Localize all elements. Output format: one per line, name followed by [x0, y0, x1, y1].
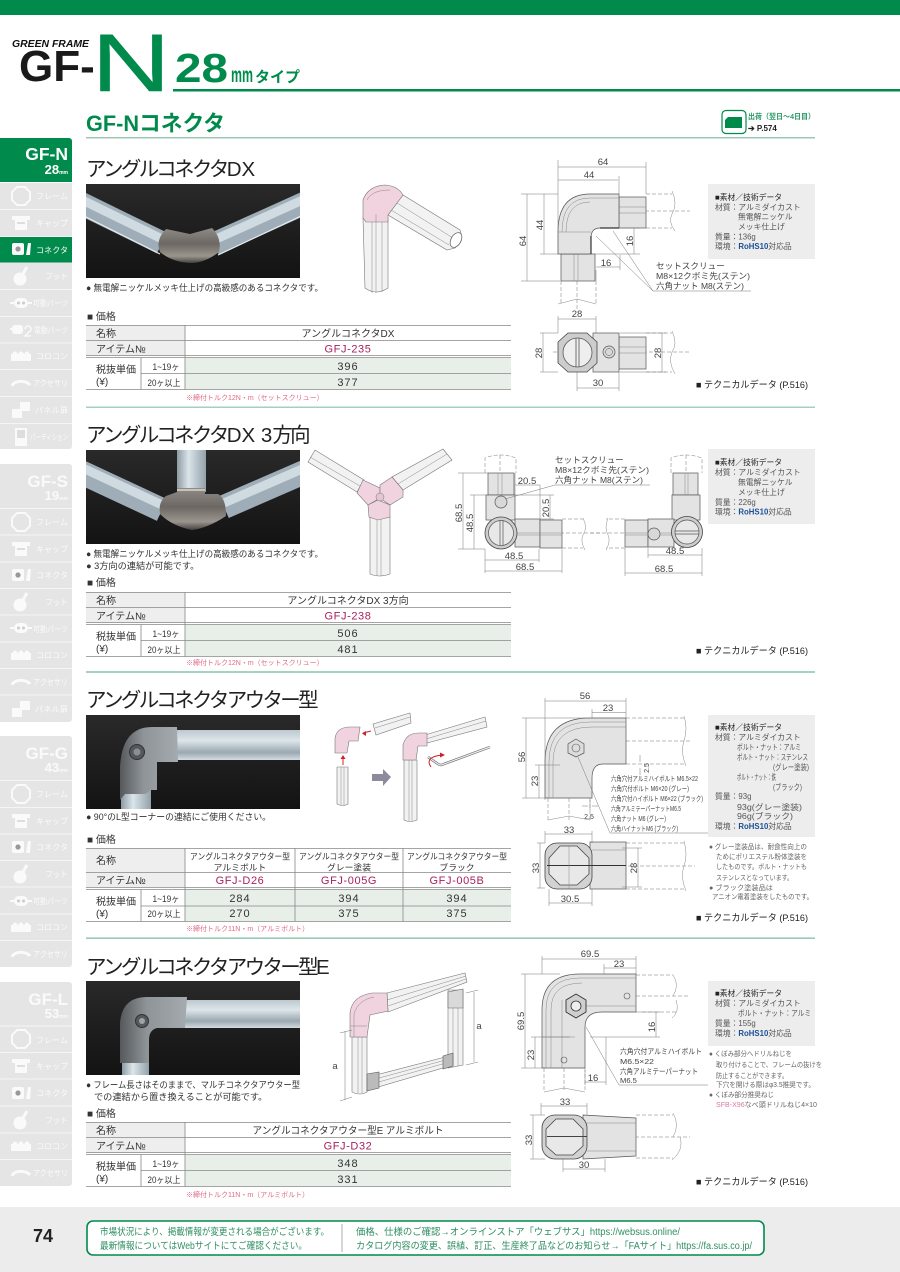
section 2 technical data link: ■ テクニカルデータ (P.516)	[696, 645, 808, 657]
section 2 price table	[86, 592, 511, 656]
section 4 dimension drawing: 69.5	[516, 1012, 527, 1030]
section 3 material data box: 材質：アルミダイカスト	[715, 732, 801, 742]
section 4 torque note: ※締付トルク11N・m（アルミボルト）	[186, 1190, 309, 1199]
section 1 end-view drawing	[534, 309, 690, 391]
shipping badge: 出荷（翌日〜4日目）	[748, 112, 815, 121]
section 3 material data box: 質量：93g	[715, 791, 751, 801]
section 2 left dimension drawing: 68.5	[516, 562, 534, 573]
sidebar: GF-L 53mm: GF-L	[28, 990, 68, 1009]
sidebar: GF-L 53mm: アクセサリ	[33, 1169, 68, 1178]
section 1 isometric illustration	[363, 185, 464, 293]
section 4 title: アングルコネクタアウター型E	[86, 956, 330, 979]
section 3 finish notes: ステンレスとなっています。	[716, 874, 793, 882]
section 4 frame illustration	[332, 973, 482, 1101]
sidebar: GF-L 53mm	[0, 982, 72, 1186]
section 4 material data box: 環境：RoHS10対応品	[715, 1028, 792, 1038]
section 4 frame illustration: a	[332, 1061, 338, 1072]
section 3 dimension drawing: 六角ハイナットM6 (ブラック)	[611, 824, 678, 833]
section 3 price table: 270	[229, 908, 251, 920]
section 3 finish notes: したものです。ボルト・ナットも	[716, 863, 807, 871]
section 2 title: アングルコネクタDX 3方向	[86, 424, 309, 447]
section 1 price table: 20ヶ以上	[148, 378, 180, 388]
section 3 material data box: 96g(ブラック)	[737, 811, 793, 821]
section 4 dimension drawing: M6.5	[620, 1076, 637, 1085]
section 2 left dimension drawing	[454, 455, 650, 573]
section 2 material data box: 質量：226g	[715, 497, 756, 507]
section 3 photo: outer elbow	[86, 715, 300, 809]
section 1 price table: アイテム№	[96, 344, 146, 356]
series logo: GF-N 28mm type: mm	[231, 64, 253, 87]
section 2 left dimension drawing: 68.5	[454, 504, 465, 522]
section 3 dimension drawing: 六角ナット M6 (グレー)	[611, 814, 666, 823]
section 4 end-view drawing: 33	[524, 1135, 535, 1145]
sidebar: GF-S 19mm: パネル扉	[35, 705, 68, 714]
sidebar: GF-S 19mm: フット	[45, 598, 68, 607]
top green band	[0, 0, 900, 15]
section 3 end-view drawing: 28	[629, 863, 640, 873]
section 2 material data box: 材質：アルミダイカスト	[715, 467, 801, 477]
section 3 end-view drawing: 30.5	[561, 894, 579, 905]
section 3 price table	[86, 848, 511, 922]
section 3 dimension drawing: 六角穴付ボルト M6×20 (グレー)	[611, 784, 689, 793]
sidebar: GF-G 43mm: 可動パーツ	[33, 897, 68, 906]
section 1 price label: ■ 価格	[87, 310, 116, 323]
sidebar: GF-G 43mm: アクセサリ	[33, 950, 68, 959]
sidebar: GF-S 19mm: 可動パーツ	[33, 625, 68, 634]
section 4 end-view drawing: 33	[560, 1097, 570, 1108]
sidebar: GF-G 43mm: GF-G	[26, 744, 68, 763]
section 3 material data box: (グレー塗装)	[773, 762, 809, 772]
section 1 material data box: ■素材／技術データ	[715, 192, 782, 202]
section 2 right dimension drawing: 48.5	[666, 546, 684, 557]
sidebar: GF-N 28mm: キャップ	[36, 219, 68, 228]
section 3 dimension drawing: 六角穴付ハイボルト M6×22 (ブラック)	[611, 794, 703, 803]
section 4 dimension drawing: 六角アルミテーパーナット	[620, 1066, 698, 1076]
section 3 price table: アイテム№	[96, 875, 146, 887]
section 1 dimension drawing: 64	[518, 236, 529, 246]
footer notice box: 市場状況により、掲載情報が変更される場合がございます。	[100, 1225, 329, 1238]
series logo: GF-N 28mm type: GREEN FRAME	[12, 39, 89, 50]
section 1 end-view drawing: 28	[572, 309, 582, 320]
section 3 divider	[86, 938, 815, 939]
section 3 dimension drawing: 56	[580, 691, 590, 702]
section 3 dimension drawing: 56	[517, 752, 528, 762]
section 2 torque note: ※締付トルク12N・m（セットスクリュー）	[186, 658, 324, 667]
section 4 price table	[86, 1122, 511, 1186]
section 2 price table: 税抜単価	[96, 630, 136, 643]
section 3 price table: 税抜単価	[96, 895, 136, 908]
section 2 material data box: 環境：RoHS10対応品	[715, 506, 792, 516]
section 3 end-view drawing: 33	[531, 863, 542, 873]
sidebar: GF-G 43mm: キャップ	[36, 817, 68, 826]
section 3 finish notes: ● ブラック塗装品は	[709, 883, 773, 892]
section 4 screw notes	[709, 1049, 822, 1109]
section 1 material data box	[708, 184, 815, 259]
section 1 price table: 1~19ヶ	[152, 362, 180, 372]
section 4 photo: outer elbow E	[86, 981, 300, 1075]
footer band	[0, 1207, 900, 1272]
section 2 left dimension drawing: M8×12クボミ先(ステン)	[555, 464, 649, 475]
section 3 price table: グレー塗装	[327, 862, 371, 872]
sidebar: GF-N 28mm: 可動パーツ	[33, 299, 68, 308]
section 4 price table: (¥)	[96, 1174, 108, 1185]
section 1 end-view drawing: 28	[534, 348, 545, 358]
sidebar: GF-N 28mm: 28mm	[45, 162, 69, 177]
sidebar: GF-L 53mm: キャップ	[36, 1062, 68, 1071]
section 1 end-view drawing: 30	[593, 378, 603, 389]
sidebar: GF-S 19mm: アクセサリ	[33, 678, 68, 687]
section 3 price table: (¥)	[96, 909, 108, 920]
section 4 price table: 名称	[96, 1124, 116, 1137]
section 2 material data box	[708, 449, 815, 524]
section 3 price table: 20ヶ以上	[148, 909, 180, 919]
section 1 price table: 396	[337, 361, 359, 373]
section 3 end-view drawing	[531, 825, 695, 906]
series logo: GF-N 28mm type	[12, 18, 900, 109]
section 1 title: アングルコネクタDX	[86, 158, 256, 181]
section 1 dimension drawing	[518, 157, 751, 310]
sidebar: GF-L 53mm: フット	[45, 1116, 68, 1125]
section 3 price label: ■ 価格	[87, 833, 116, 846]
section 2 price table: GFJ-238	[324, 610, 372, 622]
section 2 price table: 20ヶ以上	[148, 645, 180, 655]
section 3 dimension drawing	[517, 691, 708, 833]
section 4 screw notes: 下穴を開ける際はφ3.5推奨です。	[716, 1080, 815, 1089]
section 4 end-view drawing: 30	[579, 1160, 589, 1171]
section 1 dimension drawing: 64	[598, 157, 608, 168]
section 3 torque note: ※締付トルク11N・m（アルミボルト）	[186, 924, 309, 933]
section 1 dimension drawing: 16	[601, 258, 611, 269]
section 2 price table: アイテム№	[96, 610, 146, 622]
section 4 material data box: ボルト・ナット：アルミ	[738, 1009, 811, 1018]
section 3 price table: 1~19ヶ	[152, 894, 180, 904]
sidebar: GF-L 53mm: フレーム	[36, 1036, 68, 1045]
section 2 left dimension drawing: 六角ナット M8(ステン)	[555, 474, 643, 485]
footer notice box	[87, 1221, 764, 1255]
section 4 screw notes: SFB-X96なべ頭ドリルねじ4×10	[716, 1101, 817, 1109]
sidebar: GF-S 19mm: コネクタ	[36, 571, 68, 580]
section 4 dimension drawing: 16	[647, 1022, 658, 1032]
section 3 material data box: (ブラック)	[773, 782, 802, 792]
section 1 torque note: ※締付トルク12N・m（セットスクリュー）	[186, 393, 324, 402]
section 2 price table: (¥)	[96, 644, 108, 655]
section 3 material data box: 93g(グレー塗装)	[737, 802, 802, 812]
section 3 material data box: ■素材／技術データ	[715, 722, 782, 732]
sidebar: GF-S 19mm: フレーム	[36, 518, 68, 527]
section 2 left dimension drawing: 20.5	[518, 476, 536, 487]
sidebar: GF-N 28mm: パネル扉	[35, 406, 68, 415]
sidebar: GF-N 28mm	[0, 138, 72, 449]
section 3 price table: 394	[446, 893, 468, 905]
section 3 price table: 375	[446, 908, 468, 920]
section 2 material data box: メッキ仕上げ	[738, 487, 785, 497]
section 3 dimension drawing: 六角アルミテーパーナットM6.5	[611, 804, 681, 813]
section 4 end-view drawing	[524, 1097, 690, 1172]
section 3 price table: アングルコネクタアウター型	[407, 852, 507, 862]
section 1 photo: corner joint	[86, 184, 300, 278]
section 1 material data box: メッキ仕上げ	[738, 222, 785, 232]
section 4 price table: アイテム№	[96, 1140, 146, 1152]
footer notice box: 価格、仕様のご確認→オンラインストア「ウェブサス」https://websus.online/	[356, 1225, 680, 1238]
section 4 price table: 331	[337, 1174, 359, 1186]
sidebar: GF-S 19mm	[0, 464, 72, 722]
section 1 end-view drawing: 28	[653, 348, 664, 358]
section 4 price table: アングルコネクタアウター型E アルミボルト	[252, 1124, 444, 1137]
section 1 technical data link: ■ テクニカルデータ (P.516)	[696, 379, 808, 391]
section 3 finish notes: ためにポリエステル粉体塗装を	[716, 852, 807, 861]
section 2 material data box: 無電解ニッケル	[738, 477, 793, 487]
sidebar: GF-L 53mm: 53mm	[45, 1006, 69, 1021]
sidebar: GF-G 43mm: フレーム	[36, 790, 68, 799]
sidebar: GF-S 19mm: 19mm	[45, 488, 69, 503]
section 1 dimension drawing: 16	[625, 236, 636, 246]
sidebar: GF-N 28mm: コネクタ	[36, 246, 68, 255]
section 3 finish notes	[709, 842, 813, 901]
section 4 dimension drawing: M6.5×22	[620, 1057, 654, 1066]
section 4 screw notes: ● くぼみ部分へドリルねじを	[709, 1049, 792, 1058]
section 3 end-view drawing: 33	[564, 825, 574, 836]
section 4 screw notes: 取り付けることで、フレームの抜けを	[716, 1060, 822, 1069]
section 2 right dimension drawing: 68.5	[655, 564, 673, 575]
section 2 isometric illustration	[308, 449, 452, 576]
sidebar: GF-N 28mm: 電動パーツ	[34, 326, 68, 335]
section 2 left dimension drawing: 20.5	[541, 499, 552, 517]
section 3 price table: 284	[229, 893, 251, 905]
section 1 price table	[86, 325, 511, 390]
section 3 dimension drawing: 2.5	[584, 814, 594, 821]
section 3 price table: アングルコネクタアウター型	[299, 852, 399, 862]
section 1 bullet: ● 無電解ニッケルメッキ仕上げの高級感のあるコネクタです。	[86, 282, 323, 293]
section 2 price table: 481	[337, 644, 359, 656]
sidebar: GF-G 43mm: フット	[45, 870, 68, 879]
section 2 price table: 1~19ヶ	[152, 629, 180, 639]
sidebar: GF-G 43mm: 43mm	[45, 760, 69, 775]
section 1 dimension drawing: 44	[535, 220, 546, 230]
sidebar: GF-S 19mm: コロコン	[36, 651, 68, 660]
section 1 material data box: 質量：136g	[715, 232, 756, 242]
section 4 price table: 348	[337, 1158, 359, 1170]
section 1 price table: 名称	[96, 327, 116, 340]
section 2 photo: three-way joint	[86, 450, 300, 544]
section 4 material data box: 材質：アルミダイカスト	[715, 998, 801, 1008]
section 3 material data box: ボルト・ナット：ステンレス	[737, 753, 808, 762]
section 2 bullets: ● 3方向の連結が可能です。	[86, 560, 199, 571]
section 3 price table: ブラック	[439, 862, 475, 872]
section 4 bullets: での連結から置き換えることが可能です。	[94, 1091, 267, 1102]
section 3 price table: アルミボルト	[214, 862, 266, 872]
section 3 dimension drawing: 2.5	[644, 763, 651, 773]
section 2 left dimension drawing: 48.5	[465, 514, 476, 532]
section 4 frame illustration: a	[476, 1021, 482, 1032]
heading rule	[86, 137, 815, 138]
section 3 material data box: 環境：RoHS10対応品	[715, 821, 792, 831]
section 3 price table: GFJ-005B	[430, 875, 484, 887]
section 2 price table: 名称	[96, 594, 116, 607]
section 1 price table: 377	[337, 377, 359, 389]
footer notice box: 最新情報についてはWebサイトにてご確認ください。	[100, 1239, 307, 1252]
section 1 dimension drawing: 六角ナット M8(ステン)	[656, 280, 744, 291]
sidebar: GF-L 53mm: コロコン	[36, 1142, 68, 1151]
sidebar: GF-L 53mm: コネクタ	[36, 1089, 68, 1098]
section 4 screw notes: ● くぼみ部分推奨ねじ	[709, 1090, 774, 1099]
sidebar: GF-N 28mm: アクセサリ	[33, 379, 68, 388]
section 4 price table: GFJ-D32	[324, 1140, 372, 1152]
section 3 price table: アングルコネクタアウター型	[190, 852, 290, 862]
section 4 bullets: ● フレーム長さはそのままで、マルチコネクタアウター型	[86, 1080, 300, 1090]
section 4 dimension drawing: 69.5	[581, 949, 599, 960]
section 1 price table: 税抜単価	[96, 363, 136, 376]
sidebar: GF-S 19mm: キャップ	[36, 545, 68, 554]
shipping badge: ➔ P.574	[748, 124, 777, 133]
section 3 dimension drawing: 23	[530, 776, 541, 786]
sidebar: GF-G 43mm	[0, 736, 72, 967]
section 4 material data box	[708, 981, 815, 1046]
section 3 assembly illustration	[335, 713, 490, 822]
section 3 material data box: ボルト・ナット：アルミ	[737, 743, 801, 752]
section 2 bullets	[86, 548, 323, 571]
page number: 74	[33, 1226, 53, 1246]
sidebar: GF-S 19mm: GF-S	[27, 472, 68, 491]
section 1 material data box: 環境：RoHS10対応品	[715, 241, 792, 251]
section 3 price table: GFJ-005G	[321, 875, 377, 887]
section 4 bullets	[86, 1080, 300, 1102]
section 1 price table: アングルコネクタDX	[302, 327, 395, 340]
section 4 price label: ■ 価格	[87, 1107, 116, 1120]
section 2 right dimension drawing	[590, 455, 702, 576]
section 4 dimension drawing: 23	[614, 959, 624, 970]
section 2 left dimension drawing: セットスクリュー	[555, 455, 624, 465]
section 4 dimension drawing: 23	[526, 1050, 537, 1060]
section 3 material data box: ボルト・ナット：鉄	[737, 772, 776, 782]
section 4 price table: 税抜単価	[96, 1160, 136, 1173]
section 2 price label: ■ 価格	[87, 576, 116, 589]
section 2 divider	[86, 672, 815, 673]
series logo: GF-N 28mm type: N	[92, 18, 170, 109]
section 4 price table: 20ヶ以上	[148, 1175, 180, 1185]
section 1 dimension drawing: M8×12クボミ先(ステン)	[656, 270, 750, 281]
series logo: GF-N 28mm type: GF-	[19, 42, 95, 91]
section 4 dimension drawing: 16	[588, 1073, 598, 1084]
sidebar: GF-N 28mm: フット	[45, 272, 68, 281]
section 2 price table: アングルコネクタDX 3方向	[287, 594, 409, 607]
section 3 title: アングルコネクタアウター型	[86, 689, 318, 712]
section 1 dimension drawing: 44	[584, 170, 594, 181]
section 4 dimension drawing: 六角穴付アルミハイボルト	[620, 1046, 702, 1056]
section 1 material data box: 無電解ニッケル	[738, 212, 793, 222]
section 2 price table: 506	[337, 628, 359, 640]
section 3 price table: 394	[338, 893, 360, 905]
section 3 finish notes: ● グレー塗装品は、耐食性向上の	[709, 842, 807, 851]
sidebar: GF-N 28mm: GF-N	[25, 144, 68, 164]
sidebar: GF-N 28mm: フレーム	[36, 192, 68, 201]
sidebar: GF-G 43mm: コネクタ	[36, 843, 68, 852]
section 2 left dimension drawing: 48.5	[505, 551, 523, 562]
section 3 price table: GFJ-D26	[216, 875, 264, 887]
section 4 material data box: ■素材／技術データ	[715, 988, 782, 998]
sidebar: GF-N 28mm: パーティション	[30, 433, 68, 442]
section 4 price table: 1~19ヶ	[152, 1159, 180, 1169]
section 3 finish notes: アニオン電着塗装をしたものです。	[712, 892, 813, 901]
section 3 material data box	[708, 715, 815, 837]
series logo: GF-N 28mm type: タイプ	[255, 69, 300, 86]
footer notice box: カタログ内容の変更、誤植、訂正、生産終了品などのお知らせ→「FAサイト」https://fa.sus.co.jp/	[356, 1239, 752, 1252]
section 3 dimension drawing: 23	[603, 703, 613, 714]
section 2 material data box: ■素材／技術データ	[715, 457, 782, 467]
section 1 price table: GFJ-235	[324, 344, 372, 356]
section 2 bullets: ● 無電解ニッケルメッキ仕上げの高級感のあるコネクタです。	[86, 548, 323, 559]
section 3 price table: 375	[338, 908, 360, 920]
section 4 dimension drawing	[516, 949, 708, 1092]
shipping badge	[722, 110, 815, 134]
section 1 dimension drawing: セットスクリュー	[656, 261, 725, 271]
section 1 material data box: 材質：アルミダイカスト	[715, 202, 801, 212]
section 4 screw notes: 防止することができます。	[716, 1071, 788, 1080]
section 3 price table: 名称	[96, 854, 116, 867]
section 4 technical data link: ■ テクニカルデータ (P.516)	[696, 1176, 808, 1188]
section 1 price table: (¥)	[96, 377, 108, 388]
section 1 divider	[86, 406, 815, 408]
page heading: GF-Nコネクタ	[86, 111, 225, 136]
section 3 technical data link: ■ テクニカルデータ (P.516)	[696, 912, 808, 924]
section 4 material data box: 質量：155g	[715, 1018, 756, 1028]
section 3 bullet: ● 90°のL型コーナーの連結にご使用ください。	[86, 811, 271, 822]
sidebar: GF-G 43mm: コロコン	[36, 923, 68, 932]
section 3 dimension drawing: 六角穴付アルミハイボルト M6.5×22	[611, 774, 698, 783]
sidebar: GF-N 28mm: コロコン	[36, 352, 68, 361]
series logo: GF-N 28mm type: 28	[175, 45, 228, 91]
